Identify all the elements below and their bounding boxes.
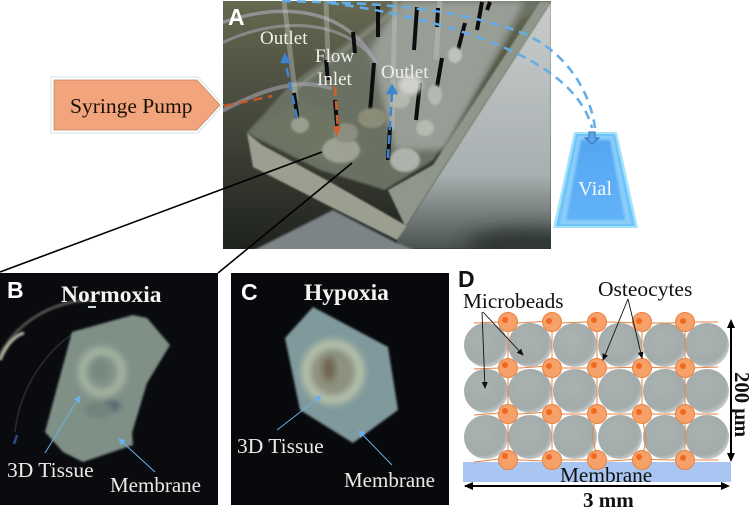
title Normoxia: Normoxia bbox=[61, 282, 162, 308]
callout lines from A to B bbox=[0, 152, 352, 273]
3D tissue ring bbox=[82, 351, 122, 393]
panel A: device photograph: Inlet bbox=[317, 69, 353, 90]
membrane bbox=[285, 307, 398, 443]
panel A: device photograph bbox=[223, 1, 551, 249]
membrane bbox=[45, 315, 170, 462]
panel letter B: B bbox=[7, 277, 24, 303]
osteocytes bbox=[498, 312, 694, 470]
tubing bbox=[224, 11, 376, 110]
label Membrane: Membrane bbox=[560, 463, 652, 487]
dimension arrow: 200 µm bbox=[730, 322, 732, 458]
connector nuts bbox=[291, 117, 309, 133]
panel D: schematic bbox=[458, 266, 750, 509]
vial: Vial bbox=[578, 178, 612, 200]
membrane bar bbox=[463, 462, 731, 482]
panel B: normoxia photo bbox=[0, 273, 218, 505]
vial bbox=[553, 132, 638, 228]
flow arrows inside photograph bbox=[224, 55, 396, 158]
label Membrane: Membrane bbox=[344, 468, 435, 492]
dimension arrow: 3 mm bbox=[465, 485, 728, 487]
panel letter A: A bbox=[228, 4, 245, 30]
device front and side walls bbox=[247, 133, 407, 240]
3D tissue ring bbox=[308, 347, 358, 398]
device interior bbox=[247, 1, 551, 190]
panel letter D: D bbox=[458, 266, 475, 292]
title Hypoxia: Hypoxia bbox=[304, 280, 389, 306]
label: Outlet left: Outlet bbox=[260, 28, 308, 49]
label: Flow Inlet: Flow bbox=[315, 46, 354, 67]
panel C: hypoxia photo bbox=[231, 273, 449, 505]
pointer arrows bbox=[482, 299, 642, 388]
label 3D Tissue: 3D Tissue bbox=[7, 458, 94, 482]
label Microbeads: Microbeads bbox=[463, 289, 564, 313]
annotation arrows bbox=[45, 396, 80, 453]
label Membrane: Membrane bbox=[110, 473, 201, 497]
syringe pump arrow bbox=[51, 77, 223, 133]
annotation arrows bbox=[277, 396, 321, 430]
panel letter C: C bbox=[241, 279, 258, 305]
syringe pump arrow: Syringe Pump bbox=[70, 94, 192, 118]
floor of the photograph bbox=[397, 2, 551, 249]
dashed blue return lines to vial bbox=[282, 1, 595, 128]
label Osteocytes: Osteocytes bbox=[598, 277, 692, 301]
label: Outlet right: Outlet bbox=[381, 62, 429, 83]
label 3D Tissue: 3D Tissue bbox=[237, 434, 324, 458]
cell membranes bbox=[474, 321, 718, 462]
microbeads bbox=[464, 323, 729, 459]
black needles bbox=[294, 2, 490, 160]
icon: vial inlet arrow bbox=[585, 132, 599, 144]
